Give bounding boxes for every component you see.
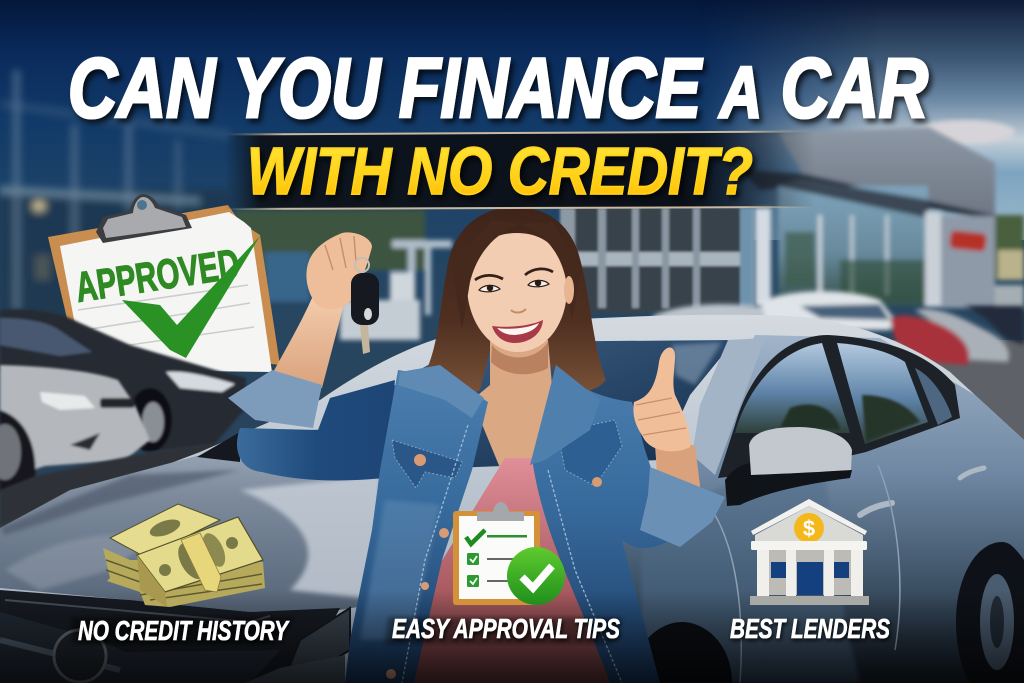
bank base	[750, 596, 869, 605]
title line one: CAN YOU FINANCE A CAR	[68, 41, 928, 135]
windshield	[345, 340, 735, 470]
sky and clouds	[700, 0, 1024, 240]
a pillar	[692, 338, 765, 475]
title line two: WITH NO CREDIT?	[247, 134, 753, 209]
door handles and seams	[715, 465, 984, 683]
rear door window	[837, 343, 928, 444]
back bundle sides	[103, 548, 265, 607]
front wheel arch	[632, 622, 732, 683]
face	[467, 233, 567, 352]
clipboard approved	[48, 194, 280, 372]
jacket buttons	[386, 454, 602, 679]
green check mark	[122, 236, 260, 358]
paper ruled lines	[78, 285, 254, 350]
raised hand	[306, 232, 372, 309]
bank door and windows	[771, 562, 849, 595]
side body panel	[600, 335, 1024, 683]
left front placket	[402, 425, 468, 683]
right jacket panel	[533, 365, 670, 683]
thumbs up hand	[633, 347, 690, 451]
icon: checklist	[453, 502, 565, 605]
smile	[492, 320, 543, 343]
bank columns	[757, 550, 863, 596]
car logo	[54, 630, 106, 682]
car roof	[0, 315, 1024, 683]
left cuff	[228, 370, 322, 428]
headline banner	[225, 130, 815, 210]
icon: bank building	[750, 499, 869, 605]
nose	[511, 309, 526, 313]
center showroom building	[560, 208, 754, 313]
clipboard clip	[96, 194, 192, 243]
dark car left	[0, 310, 246, 452]
right arm	[655, 445, 703, 525]
neck and chest	[472, 340, 572, 480]
label: best lenders: BEST LENDERS	[730, 613, 890, 644]
left jacket panel	[345, 370, 488, 683]
bottom vignette	[0, 590, 1024, 683]
label: easy approval tips: EASY APPROVAL TIPS	[392, 613, 620, 644]
right dealership building	[740, 127, 1024, 310]
right pavement	[850, 340, 1024, 470]
parked cars right	[640, 291, 1024, 365]
chin shadow	[491, 342, 548, 374]
clipboard paper	[60, 212, 272, 372]
window frame	[718, 335, 960, 478]
front bundle top	[137, 517, 263, 592]
back bundle top	[110, 504, 220, 557]
front bundle side	[137, 555, 167, 607]
shirt	[410, 458, 612, 683]
green check badge	[507, 547, 565, 605]
rear quarter window	[915, 368, 952, 425]
checklist board	[453, 511, 540, 605]
checklist paper	[459, 516, 534, 599]
hair back	[424, 207, 606, 395]
right cuff	[640, 467, 725, 547]
left glass building	[0, 70, 230, 320]
left pocket	[392, 440, 462, 488]
right front placket	[548, 470, 622, 683]
trees and mid buildings	[235, 210, 452, 340]
dollar coin: $	[803, 516, 815, 541]
eyebrows and eyes	[475, 269, 553, 292]
hood	[0, 420, 400, 612]
bank roof	[751, 499, 867, 535]
front grille and bumper	[0, 590, 340, 683]
right pocket	[558, 420, 622, 486]
paper band	[181, 533, 221, 592]
front window	[735, 343, 850, 433]
icon: stack of cash	[103, 504, 265, 607]
silver car left	[0, 365, 150, 492]
ear	[564, 276, 574, 304]
bank entablature	[751, 541, 867, 550]
bumper corner	[245, 655, 345, 683]
hair front strands	[452, 220, 582, 330]
checklist clip	[477, 502, 524, 521]
mirror	[725, 427, 852, 506]
checklist items	[466, 530, 527, 587]
woman holding key with thumbs up	[228, 207, 725, 683]
left forearm	[270, 298, 345, 388]
left sleeve	[237, 380, 395, 480]
label: no credit history: NO CREDIT HISTORY	[78, 615, 290, 646]
main grey car	[0, 315, 1024, 683]
bank wall	[762, 550, 856, 595]
headlight	[288, 608, 350, 670]
left collar	[398, 365, 484, 418]
approved text: APPROVED	[72, 240, 242, 311]
car key fob	[351, 258, 379, 354]
clipboard board	[48, 205, 280, 365]
background: dealership scene	[0, 0, 1024, 528]
right collar	[530, 365, 600, 465]
road left	[0, 440, 240, 530]
background cars left	[0, 310, 246, 530]
rear wheel	[956, 542, 1024, 683]
